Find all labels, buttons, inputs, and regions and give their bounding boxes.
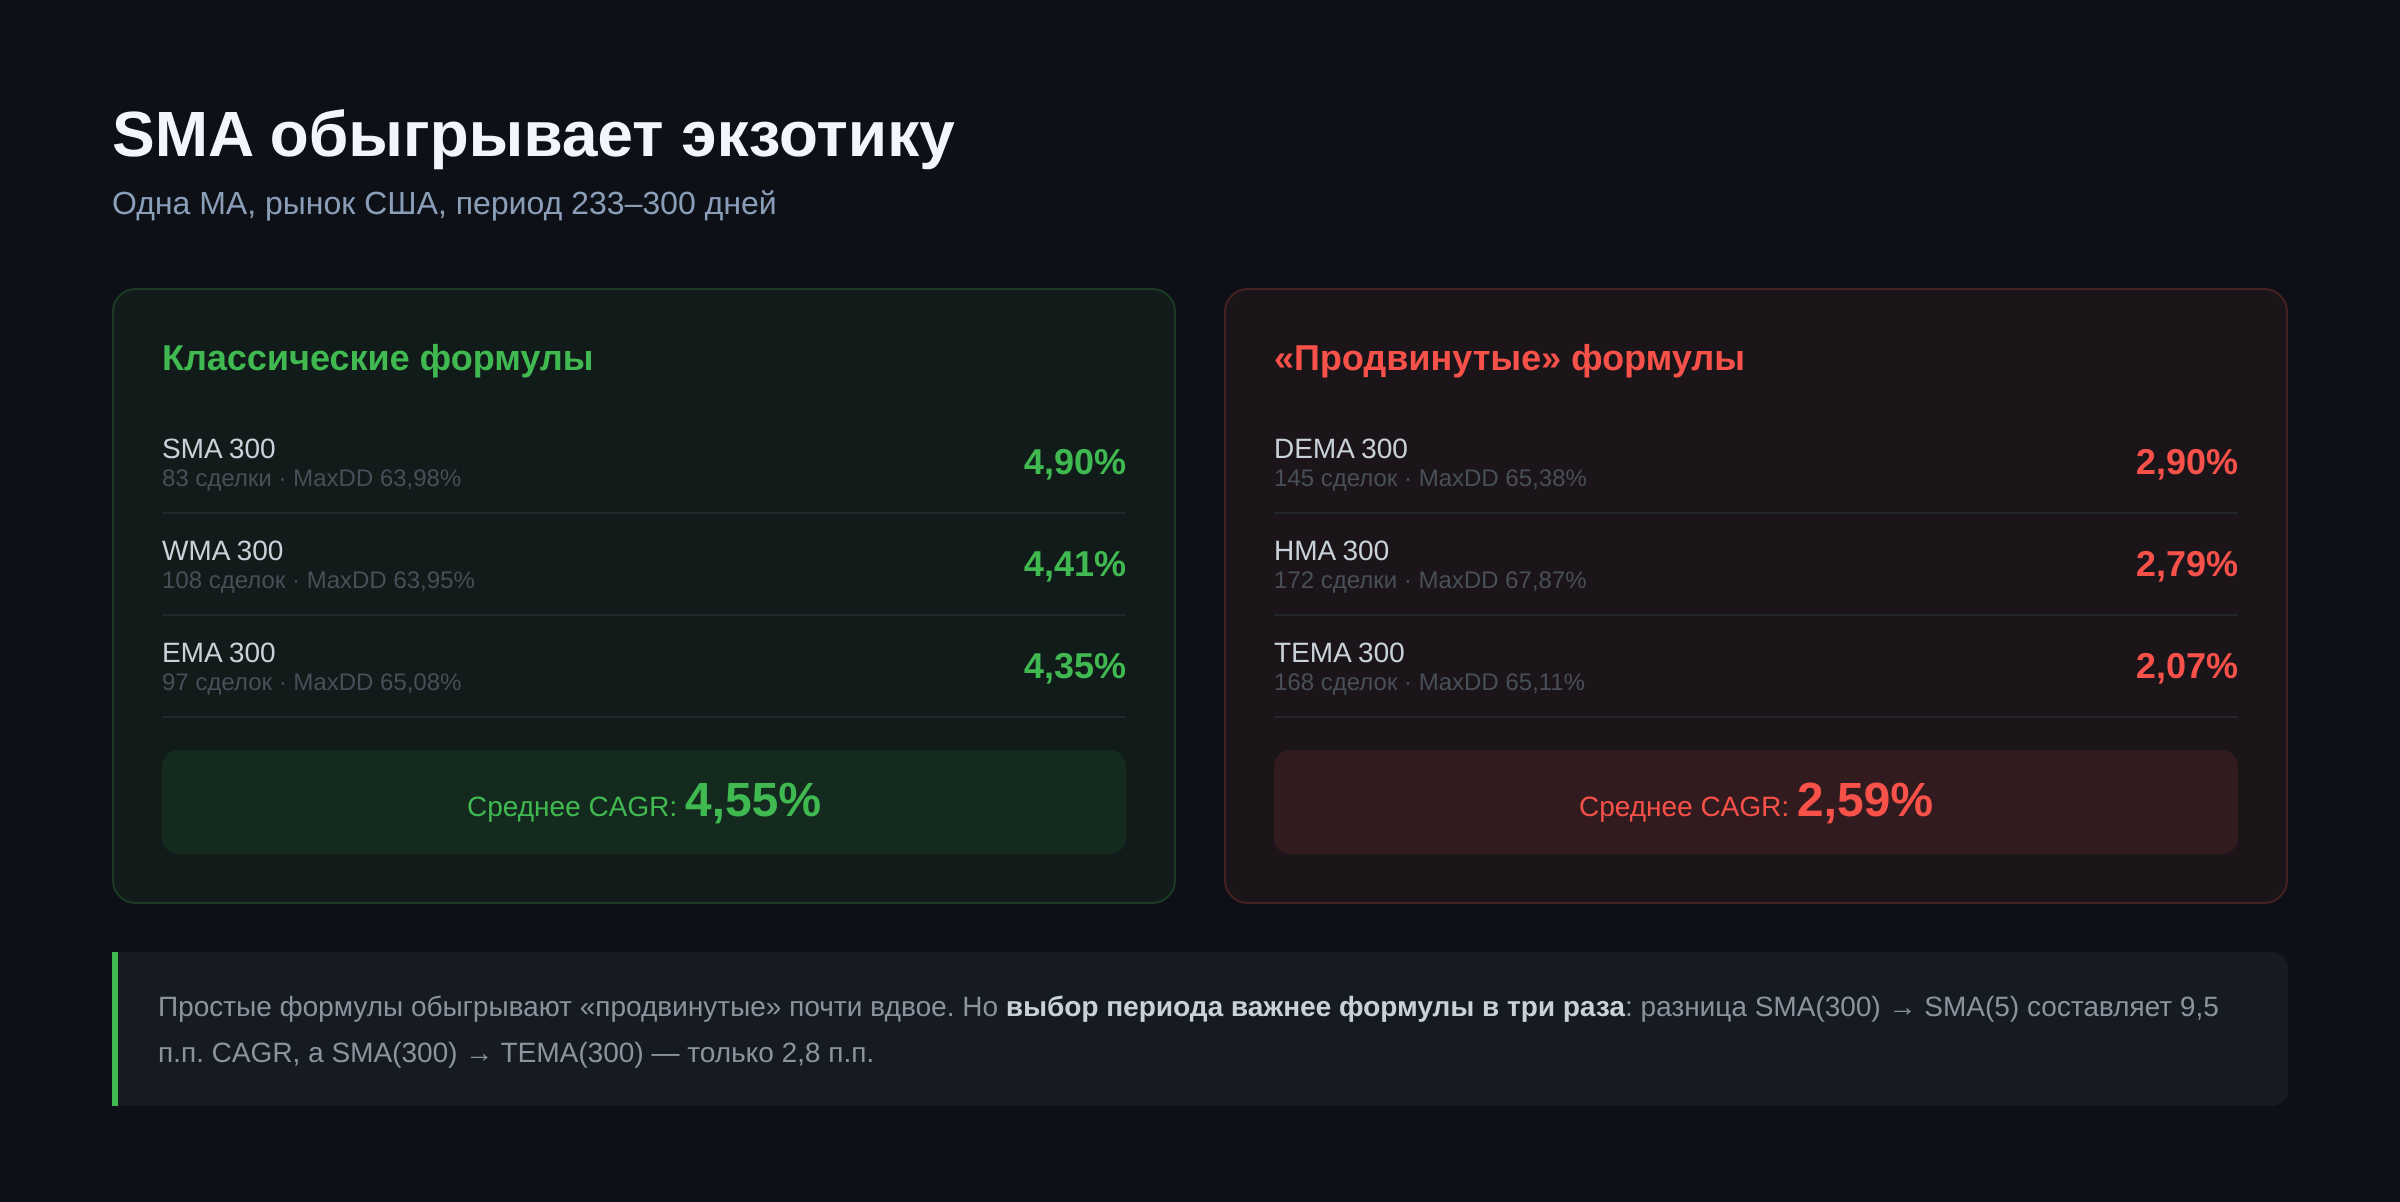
panel heading: Классические формулы (162, 337, 594, 378)
row name: TEMA 300 (1274, 637, 1405, 668)
row value: 2,90% (2136, 441, 2238, 482)
row value: 2,79% (2136, 543, 2238, 584)
row: DEMA 300 (1274, 412, 2238, 514)
title: SMA обыгрывает экзотику (112, 98, 955, 170)
summary: average CAGR (1274, 750, 2238, 854)
callout: conclusion note: п.п. CAGR, а SMA(300) → TEMA(300) — только 2,8 п.п. (158, 1037, 874, 1068)
row details: 83 сделки · MaxDD 63,98% (162, 465, 461, 492)
row: EMA 300 (162, 616, 1126, 718)
row value: 4,90% (1024, 441, 1126, 482)
row value: 4,35% (1024, 645, 1126, 686)
row: TEMA 300 (1274, 616, 2238, 718)
row: HMA 300 (1274, 514, 2238, 616)
panel: classic formulas (112, 288, 1176, 904)
row details: 168 сделок · MaxDD 65,11% (1274, 669, 1585, 696)
row name: EMA 300 (162, 637, 276, 668)
callout: conclusion note: Простые формулы обыгрывают «продвинутые» почти вдвое. Но выбор периода важнее формулы в три раза: разница SMA(300) → SMA(5) составляет 9,5 (158, 991, 2219, 1022)
row: SMA 300 (162, 412, 1126, 514)
summary: average CAGR: Среднее CAGR: 2,59% (1579, 774, 1933, 827)
row name: WMA 300 (162, 535, 283, 566)
callout: conclusion note (112, 952, 2288, 1106)
row details: 145 сделок · MaxDD 65,38% (1274, 465, 1587, 492)
row value: 2,07% (2136, 645, 2238, 686)
row details: 97 сделок · MaxDD 65,08% (162, 669, 461, 696)
row name: HMA 300 (1274, 535, 1389, 566)
row name: DEMA 300 (1274, 433, 1408, 464)
panel: advanced formulas (1224, 288, 2288, 904)
row details: 108 сделок · MaxDD 63,95% (162, 567, 475, 594)
subtitle: Одна MA, рынок США, период 233–300 дней (112, 185, 777, 221)
summary: average CAGR (162, 750, 1126, 854)
row name: SMA 300 (162, 433, 276, 464)
row details: 172 сделки · MaxDD 67,87% (1274, 567, 1587, 594)
row: WMA 300 (162, 514, 1126, 616)
summary: average CAGR: Среднее CAGR: 4,55% (467, 774, 821, 827)
panel heading: «Продвинутые» формулы (1274, 337, 1745, 378)
row value: 4,41% (1024, 543, 1126, 584)
